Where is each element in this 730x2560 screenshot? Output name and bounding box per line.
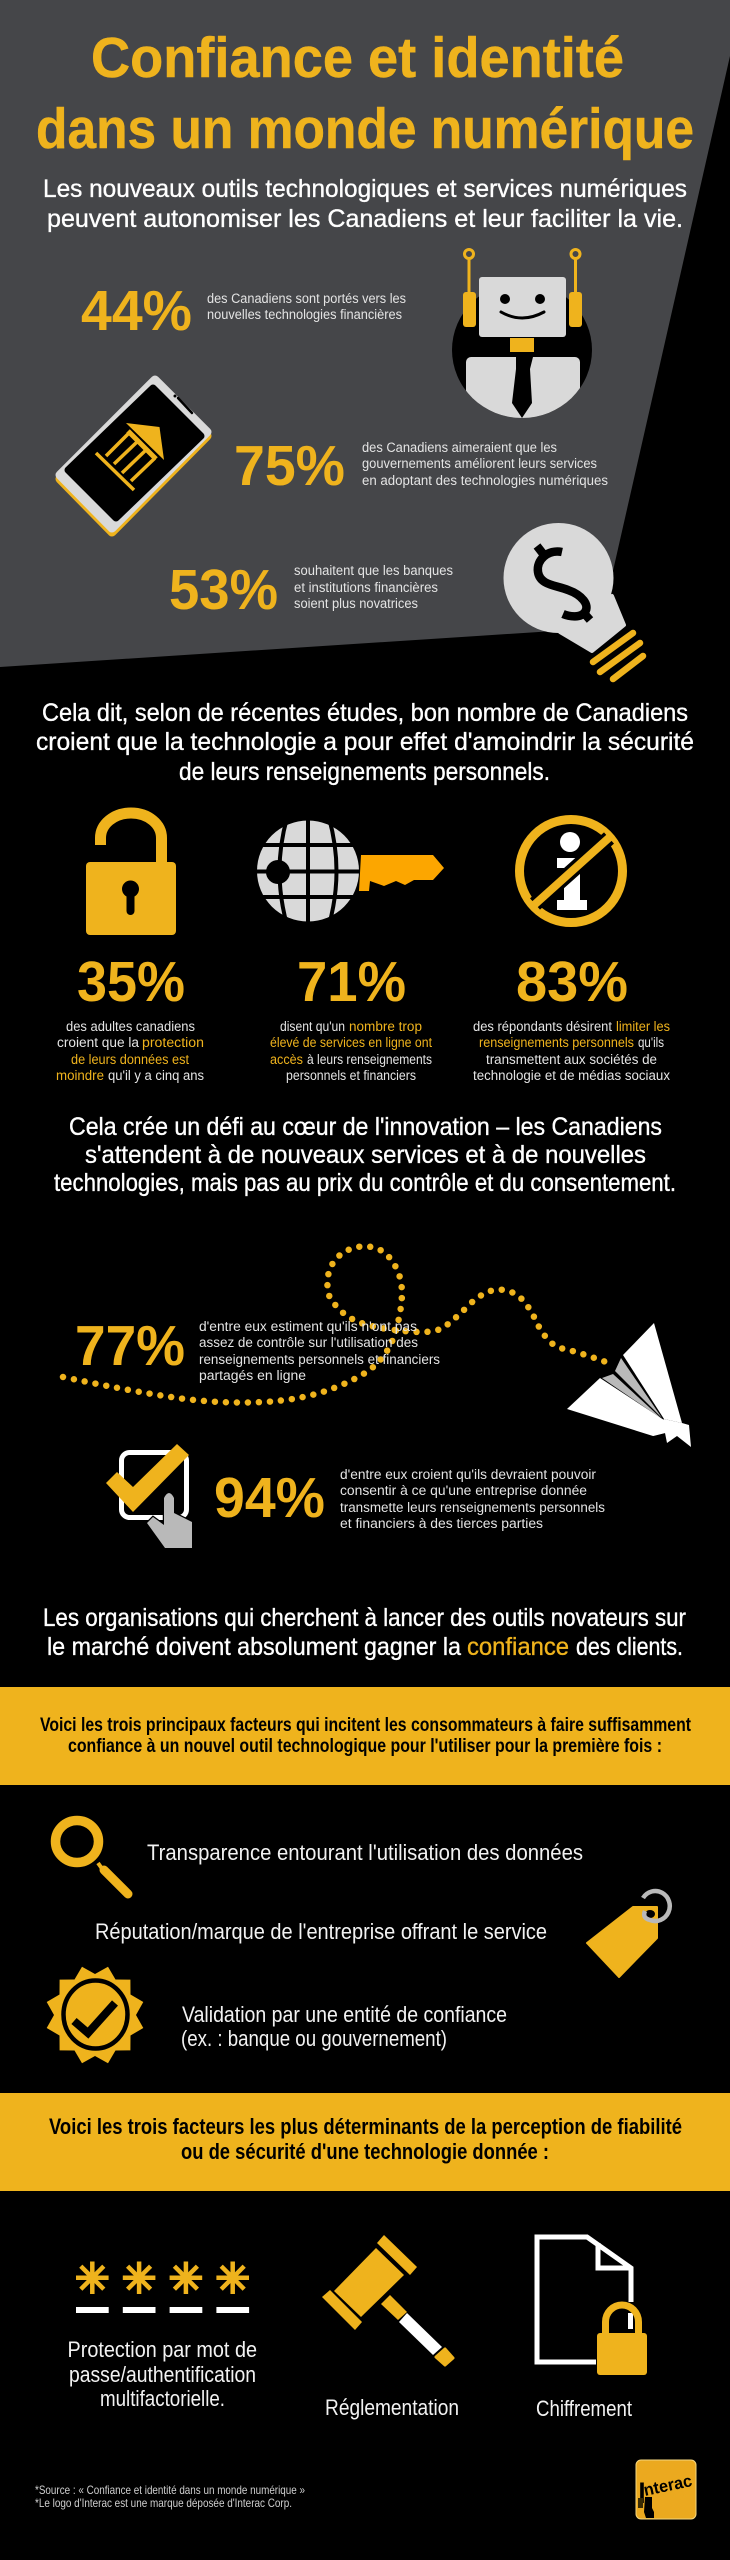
stat: 94%: transmette leurs renseignements personnels — [340, 1500, 605, 1515]
stat: 44%: des Canadiens sont portés vers les — [207, 291, 406, 306]
factor: transparency: Transparence entourant l'utilisation des données — [147, 1840, 583, 1865]
factor: validation — [181, 2002, 507, 2051]
stat: 94% — [214, 1466, 605, 1531]
stat: 77%: renseignements personnels et financiers — [199, 1352, 440, 1367]
stat: 35%: protection — [142, 1035, 204, 1050]
title: Confiance et identité — [91, 26, 624, 90]
stat: 53%: et institutions financières — [294, 580, 438, 595]
factor: reputation: Réputation/marque de l'entreprise offrant le service — [95, 1919, 547, 1944]
stat: 71%: à leurs renseignements — [307, 1052, 432, 1067]
banner: security factors — [0, 2093, 730, 2191]
intro text: peuvent autonomiser les Canadiens et leur faciliter la vie. — [47, 205, 683, 233]
stat: 83%: transmettent aux sociétés de — [486, 1052, 657, 1067]
stat: 83%: technologie et de médias sociaux — [473, 1068, 670, 1083]
dotted flight path — [63, 1246, 606, 1403]
text: Cela dit — [36, 699, 694, 786]
icon: tag — [587, 1891, 670, 1977]
stat: 94%: d'entre eux croient qu'ils devraient pouvoir — [340, 1467, 597, 1482]
stat: 75%: 75% — [234, 434, 345, 498]
logo: Interac — [636, 2460, 696, 2519]
icon: gavel — [322, 2235, 453, 2365]
text: organisations: le marché doivent absolument gagner la — [47, 1633, 461, 1661]
stat: 35%: 35% — [77, 950, 185, 1014]
stat: 53%: 53% — [169, 558, 278, 622]
stat: 83%: 83% — [516, 950, 628, 1014]
stat: 77%: partagés en ligne — [199, 1368, 306, 1383]
stat: 94%: 94% — [214, 1466, 325, 1530]
stat: 83%: renseignements personnels — [479, 1035, 634, 1050]
footnotes: *Source : « Confiance et identité dans un monde numérique » — [35, 2483, 305, 2497]
stat: 83%: des répondants désirent — [473, 1019, 612, 1034]
stat: 83%: qu'ils — [638, 1035, 664, 1050]
text: Cela dit: de leurs renseignements personnels. — [179, 758, 550, 786]
factor: validation: Validation par une entité de confiance — [182, 2002, 507, 2027]
icon: validation badge — [47, 1967, 143, 2063]
icon: light bulb with dollar — [504, 523, 643, 679]
stat: 71%: élevé de services en ligne ont — [270, 1035, 432, 1050]
stat: 71%: 71% — [297, 950, 406, 1014]
stat: 35%: qu'il y a cinq ans — [108, 1068, 204, 1083]
stat: 94%: consentir à ce qu'une entreprise donnée — [340, 1483, 587, 1498]
icon: paper plane — [567, 1323, 691, 1447]
stat: 35%: des adultes canadiens — [66, 1019, 195, 1034]
stat: 35%: croient que la — [57, 1035, 139, 1050]
stat: 77% — [75, 1314, 440, 1383]
intro text — [43, 175, 687, 233]
text: Cela dit: Cela dit, selon de récentes études, bon nombre de Canadiens — [42, 699, 688, 727]
stat: 71%: personnels et financiers — [286, 1068, 416, 1083]
stat: 77%: 77% — [75, 1314, 185, 1378]
icon: magnifier — [56, 1820, 128, 1894]
stat: 71%: nombre trop — [349, 1019, 422, 1034]
stat: 77%: d'entre eux estiment qu'ils n'ont pas — [199, 1319, 417, 1334]
stat: 94%: et financiers à des tierces parties — [340, 1516, 543, 1531]
footnotes: *Le logo d'Interac est une marque déposée d'Interac Corp. — [35, 2496, 292, 2510]
factor: validation: (ex. : banque ou gouvernement) — [181, 2026, 447, 2051]
intro text: Les nouveaux outils technologiques et services numériques — [43, 175, 687, 203]
banner: trust factors — [0, 1687, 730, 1785]
stat: 83%: limiter les — [616, 1019, 670, 1034]
stat: 35%: moindre — [56, 1068, 104, 1083]
factor: regulation: Réglementation — [325, 2395, 459, 2420]
stat: 75% — [234, 434, 608, 498]
logo: Interac: nterac — [642, 2471, 694, 2500]
stat: 71% — [270, 950, 432, 1083]
icon: globe key — [255, 818, 444, 925]
text: organisations: confiance — [467, 1633, 569, 1661]
icon: phone with bank — [60, 380, 207, 532]
stat: 44%: nouvelles technologies financières — [207, 307, 402, 322]
stat: 75%: en adoptant des technologies numériques — [362, 473, 608, 488]
banner: security factors: ou de sécurité d'une technologie donnée : — [181, 2139, 549, 2164]
icon: password asterisks — [76, 2262, 249, 2313]
icon: locked document — [537, 2237, 647, 2375]
text: Cela dit: croient que la technologie a pour effet d'amoindrir la sécurité — [36, 728, 694, 756]
text: organisations — [43, 1604, 686, 1661]
stat: 75%: gouvernements améliorent leurs services — [362, 456, 597, 471]
text: Cela crée un défi — [54, 1113, 676, 1197]
text: Cela crée un défi: Cela crée un défi au cœur de l'innovation – les Canadiens — [69, 1113, 662, 1141]
stat: 35% — [56, 950, 204, 1083]
title — [36, 26, 694, 161]
stat: 71%: accès — [270, 1052, 303, 1067]
icon: checkbox with hand — [106, 1444, 192, 1548]
text: organisations: des clients. — [576, 1633, 683, 1661]
stat: 77%: assez de contrôle sur l'utilisation des — [199, 1335, 418, 1350]
factor: password protection — [68, 2337, 257, 2411]
stat: 53%: soient plus novatrices — [294, 596, 418, 611]
factor: password protection: multifactorielle. — [100, 2386, 225, 2411]
stat: 75%: des Canadiens aimeraient que les — [362, 440, 557, 455]
footnotes — [35, 2483, 305, 2510]
stat: 35%: de leurs données est — [71, 1052, 189, 1067]
stat: 44%: 44% — [81, 279, 192, 343]
stat: 83% — [473, 950, 670, 1083]
stat: 53% — [169, 558, 453, 622]
stat: 71%: disent qu'un — [280, 1019, 345, 1034]
factor: password protection: Protection par mot de — [68, 2337, 257, 2362]
icon: no information — [520, 820, 622, 922]
factor: encryption: Chiffrement — [536, 2396, 632, 2421]
text: Cela crée un défi: s'attendent à de nouveaux services et à de nouvelles — [85, 1141, 646, 1169]
stat: 44% — [81, 279, 406, 343]
factor: password protection: passe/authentification — [69, 2362, 256, 2387]
logo: Interac: I — [638, 2477, 646, 2510]
icon: robot in a suit — [452, 250, 592, 427]
stat: 53%: souhaitent que les banques — [294, 563, 453, 578]
icon: open padlock — [86, 813, 176, 935]
